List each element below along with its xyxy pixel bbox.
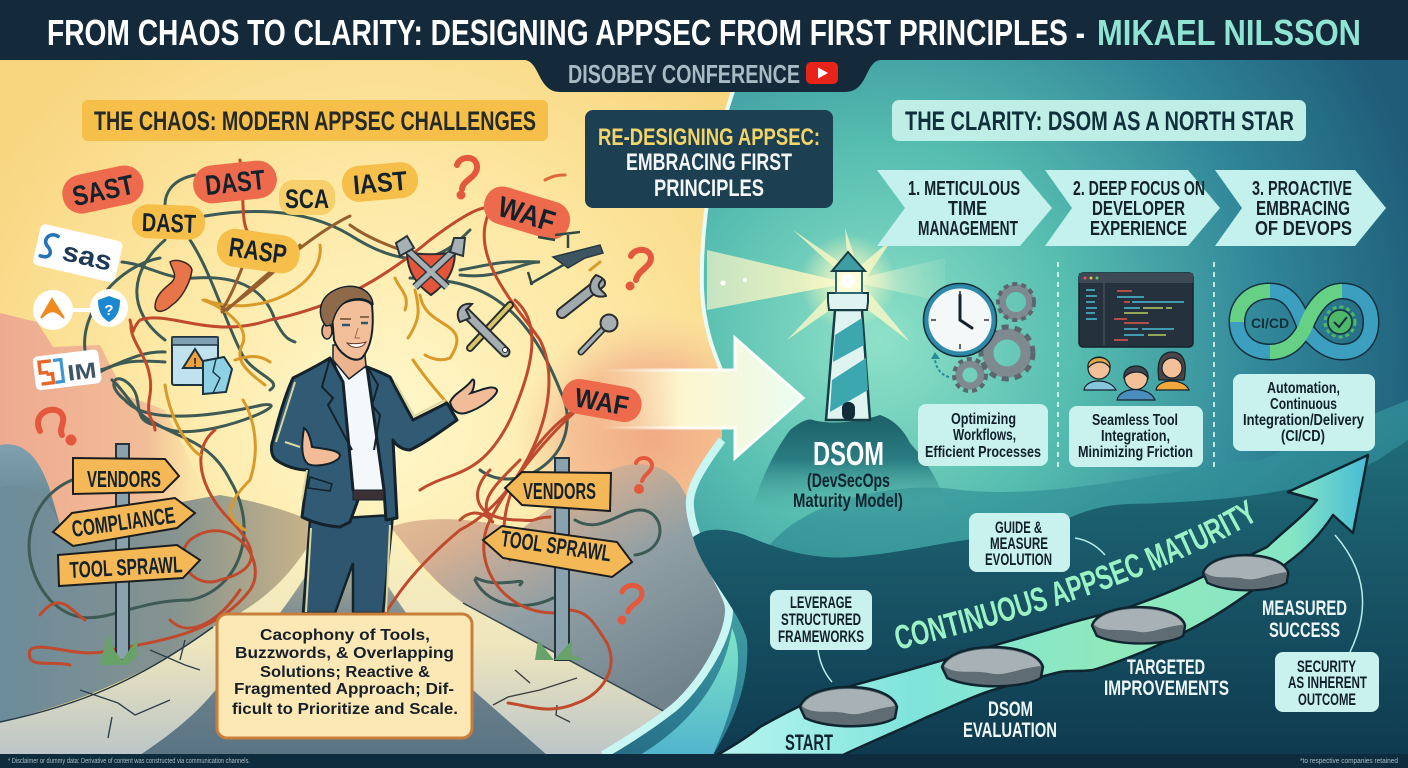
logo: orange chevron — [33, 290, 73, 330]
tag: SCA: SCA — [285, 184, 329, 214]
icon: code editor — [1079, 273, 1193, 347]
sign: tool sprawl — [58, 545, 200, 586]
gallery — [828, 293, 868, 310]
icon: wrench large — [562, 275, 606, 313]
panel: re-designing appsec: RE-DESIGNING APPSEC: — [598, 124, 820, 151]
card: optimizing workflows: Workflows, — [953, 427, 1016, 444]
logo: IM — [32, 349, 102, 391]
dsom subtitle: (DevSecOps — [807, 471, 890, 492]
question mark right top — [626, 250, 651, 290]
footnote right: *to respective companies retained — [1300, 758, 1398, 765]
tag: WAF top: WAF — [494, 191, 559, 239]
sign: tool sprawl right — [483, 525, 632, 577]
description box: Cacophony of Tools, — [260, 627, 430, 644]
hair — [320, 286, 373, 326]
hand right — [450, 380, 497, 414]
chevron 1: meticulous time management: TIME — [948, 198, 987, 220]
roof — [832, 252, 865, 271]
growth arrow path — [717, 455, 1368, 755]
stone 2 — [942, 647, 1043, 686]
panel: re-designing appsec: PRINCIPLES — [654, 175, 764, 202]
callout: guide and measure evolution: MEASURE — [990, 535, 1048, 553]
sign: vendors: VENDORS — [87, 466, 161, 492]
description box: ficult to Prioritize and Scale. — [232, 701, 458, 718]
question mark right mid — [636, 458, 652, 492]
title: MIKAEL NILSSON — [1097, 12, 1361, 53]
description box: Buzzwords, & Overlapping — [235, 645, 454, 662]
card: optimizing workflows: Optimizing — [951, 411, 1016, 428]
stone 1 — [800, 687, 897, 726]
icon: clock and gears — [924, 284, 1034, 391]
step label: targeted improvements: TARGETED — [1127, 656, 1205, 679]
callout: security as inherent outcome: OUTCOME — [1298, 691, 1356, 709]
dsom subtitle: Maturity Model) — [793, 491, 903, 512]
title: FROM CHAOS TO CLARITY: DESIGNING APPSEC FROM FIRST PRINCIPLES - — [47, 12, 1085, 53]
step label: measured success: SUCCESS — [1269, 619, 1340, 642]
card: automation ci/cd: Continuous — [1270, 396, 1337, 413]
step label: targeted improvements: IMPROVEMENTS — [1104, 677, 1229, 700]
callout: security as inherent outcome: AS INHERENT — [1288, 674, 1367, 692]
tag: DAST yellow: DAST — [141, 207, 197, 239]
dividers — [1058, 262, 1214, 467]
chevron 1: meticulous time management: MANAGEMENT — [918, 218, 1018, 240]
callout: security as inherent outcome — [1275, 535, 1379, 712]
icon: ci/cd infinity loop: CI/CD — [1251, 315, 1289, 331]
icon: ci/cd infinity loop — [1237, 291, 1371, 352]
callout: leverage structured frameworks — [770, 590, 872, 682]
tag: IAST: IAST — [352, 166, 409, 200]
logo: shield — [72, 289, 128, 327]
logo: IM: IM — [66, 357, 98, 386]
card: automation ci/cd: Integration/Delivery — [1243, 412, 1364, 429]
chevron 2: deep focus on developer experience: 2. DEEP FOCUS ON — [1073, 178, 1205, 200]
heading: the clarity — [892, 100, 1306, 141]
signpost left — [53, 444, 200, 665]
background: clarity side — [603, 40, 1408, 755]
icon: red creature — [155, 260, 192, 311]
icon: broken browser window — [172, 337, 232, 394]
lantern — [836, 271, 862, 293]
title bar — [0, 0, 1408, 92]
trousers — [303, 515, 393, 613]
island — [750, 415, 950, 515]
step label: dsom evaluation: DSOM — [988, 698, 1033, 721]
chevron 3: proactive embracing of devops: 3. PROACTIVE — [1252, 178, 1352, 200]
chevron 3: proactive embracing of devops: EMBRACING — [1256, 198, 1350, 220]
stone 4 — [1203, 555, 1288, 590]
icon: shield with crossed wrenches — [396, 236, 465, 295]
jacket — [271, 358, 358, 527]
callout: leverage structured frameworks: FRAMEWORKS — [778, 628, 864, 646]
background: chaos side — [0, 0, 785, 768]
chevron 3: proactive embracing of devops: OF DEVOPS — [1255, 218, 1352, 240]
tag: SAST: SAST — [70, 169, 137, 212]
stepping stones — [800, 555, 1288, 726]
description box: Solutions; Reactive & — [260, 664, 430, 681]
footnote left: * Disclaimer or dummy data: Derivative of content was constructed via communication channels. — [8, 758, 250, 765]
tag: RASP: RASP — [227, 232, 289, 270]
logo: sas: sas — [60, 236, 115, 277]
tag: WAF lower — [559, 376, 644, 425]
sign: tool sprawl: TOOL SPRAWL — [69, 551, 183, 583]
callout: leverage structured frameworks: LEVERAGE — [790, 594, 852, 612]
hand left — [302, 428, 340, 465]
dsom label: DSOM — [813, 435, 884, 472]
ear — [322, 323, 332, 339]
icon: youtube — [806, 62, 838, 84]
callout: guide and measure evolution — [969, 513, 1105, 572]
callout: leverage structured frameworks: STRUCTURED — [781, 611, 861, 629]
head — [332, 300, 373, 360]
sign: vendors right: VENDORS — [523, 478, 596, 504]
heading: the chaos: THE CHAOS: MODERN APPSEC CHALLENGES — [94, 106, 536, 136]
icon: broken tool fragment — [528, 232, 603, 285]
icon: broken browser window: ! — [193, 355, 197, 370]
chevron 2: deep focus on developer experience: DEVELOPER — [1092, 198, 1185, 220]
step label: dsom evaluation: EVALUATION — [963, 719, 1057, 742]
icon: developers — [1084, 352, 1189, 400]
question mark left — [38, 410, 76, 444]
tangled wires — [29, 160, 660, 709]
neck — [333, 345, 366, 379]
face — [340, 317, 369, 347]
panel: re-designing appsec: EMBRACING FIRST — [626, 149, 792, 176]
stone 3 — [1092, 607, 1185, 644]
sign: tool sprawl right: TOOL SPRAWL — [499, 525, 613, 566]
logo: sas — [32, 223, 123, 283]
tag: IAST — [341, 161, 419, 203]
card: seamless tool integration: Seamless Tool — [1092, 412, 1178, 429]
sign: compliance — [53, 498, 195, 546]
icon: wrench and screwdriver — [458, 304, 510, 352]
card: automation ci/cd — [1233, 374, 1375, 451]
tag: DAST red — [191, 159, 279, 205]
tag: WAF lower: WAF — [572, 383, 631, 421]
transition arrow — [600, 338, 803, 458]
card: seamless tool integration — [1069, 406, 1203, 467]
step label: measured success: MEASURED — [1262, 597, 1347, 620]
tag: SCA — [279, 180, 335, 215]
chevron 2: deep focus on developer experience — [1045, 170, 1220, 246]
step label: start: START — [785, 730, 833, 755]
lighthouse — [750, 252, 950, 515]
tag: DAST red: DAST — [204, 164, 267, 201]
panel: re-designing appsec — [585, 110, 833, 208]
tower — [826, 310, 870, 420]
chevron 1: meticulous time management — [877, 170, 1052, 246]
card: automation ci/cd: Automation, — [1267, 380, 1340, 397]
chevron 1: meticulous time management: 1. METICULOUS — [908, 178, 1020, 200]
tag: RASP — [215, 226, 302, 276]
sign: vendors right — [505, 472, 611, 511]
question mark right low — [618, 585, 642, 624]
heading: the chaos — [82, 100, 548, 141]
callout: guide and measure evolution: GUIDE & — [995, 519, 1042, 537]
footer bar — [0, 754, 1408, 768]
description box: Fragmented Approach; Dif- — [234, 681, 454, 698]
chevron 2: deep focus on developer experience: EXPERIENCE — [1090, 218, 1187, 240]
logo: shield: ? — [104, 302, 114, 319]
tag: WAF top — [479, 182, 575, 244]
card: optimizing workflows: Efficient Processes — [925, 444, 1041, 461]
card: automation ci/cd: (CI/CD) — [1281, 428, 1325, 445]
question marks — [38, 158, 652, 624]
belt — [353, 490, 384, 500]
sign: compliance: COMPLIANCE — [70, 502, 177, 542]
question mark top — [457, 158, 477, 198]
chevron 3: proactive embracing of devops — [1215, 170, 1386, 246]
card: seamless tool integration: Minimizing Friction — [1078, 444, 1193, 461]
heading along arrow: CONTINUOUS APPSEC MATURITY — [895, 499, 1254, 648]
light rays from lighthouse — [707, 228, 945, 342]
conference subtitle: DISOBEY CONFERENCE — [568, 59, 800, 89]
description box — [217, 614, 472, 738]
signpost right — [483, 458, 632, 660]
sign: vendors — [73, 458, 179, 494]
presenter — [271, 286, 497, 613]
callout: guide and measure evolution: EVOLUTION — [985, 551, 1052, 569]
shirt — [335, 362, 384, 492]
card: optimizing workflows — [918, 404, 1048, 466]
icon: wrench small — [581, 314, 618, 352]
card: seamless tool integration: Integration, — [1101, 428, 1170, 445]
callout: security as inherent outcome: SECURITY — [1297, 658, 1356, 676]
